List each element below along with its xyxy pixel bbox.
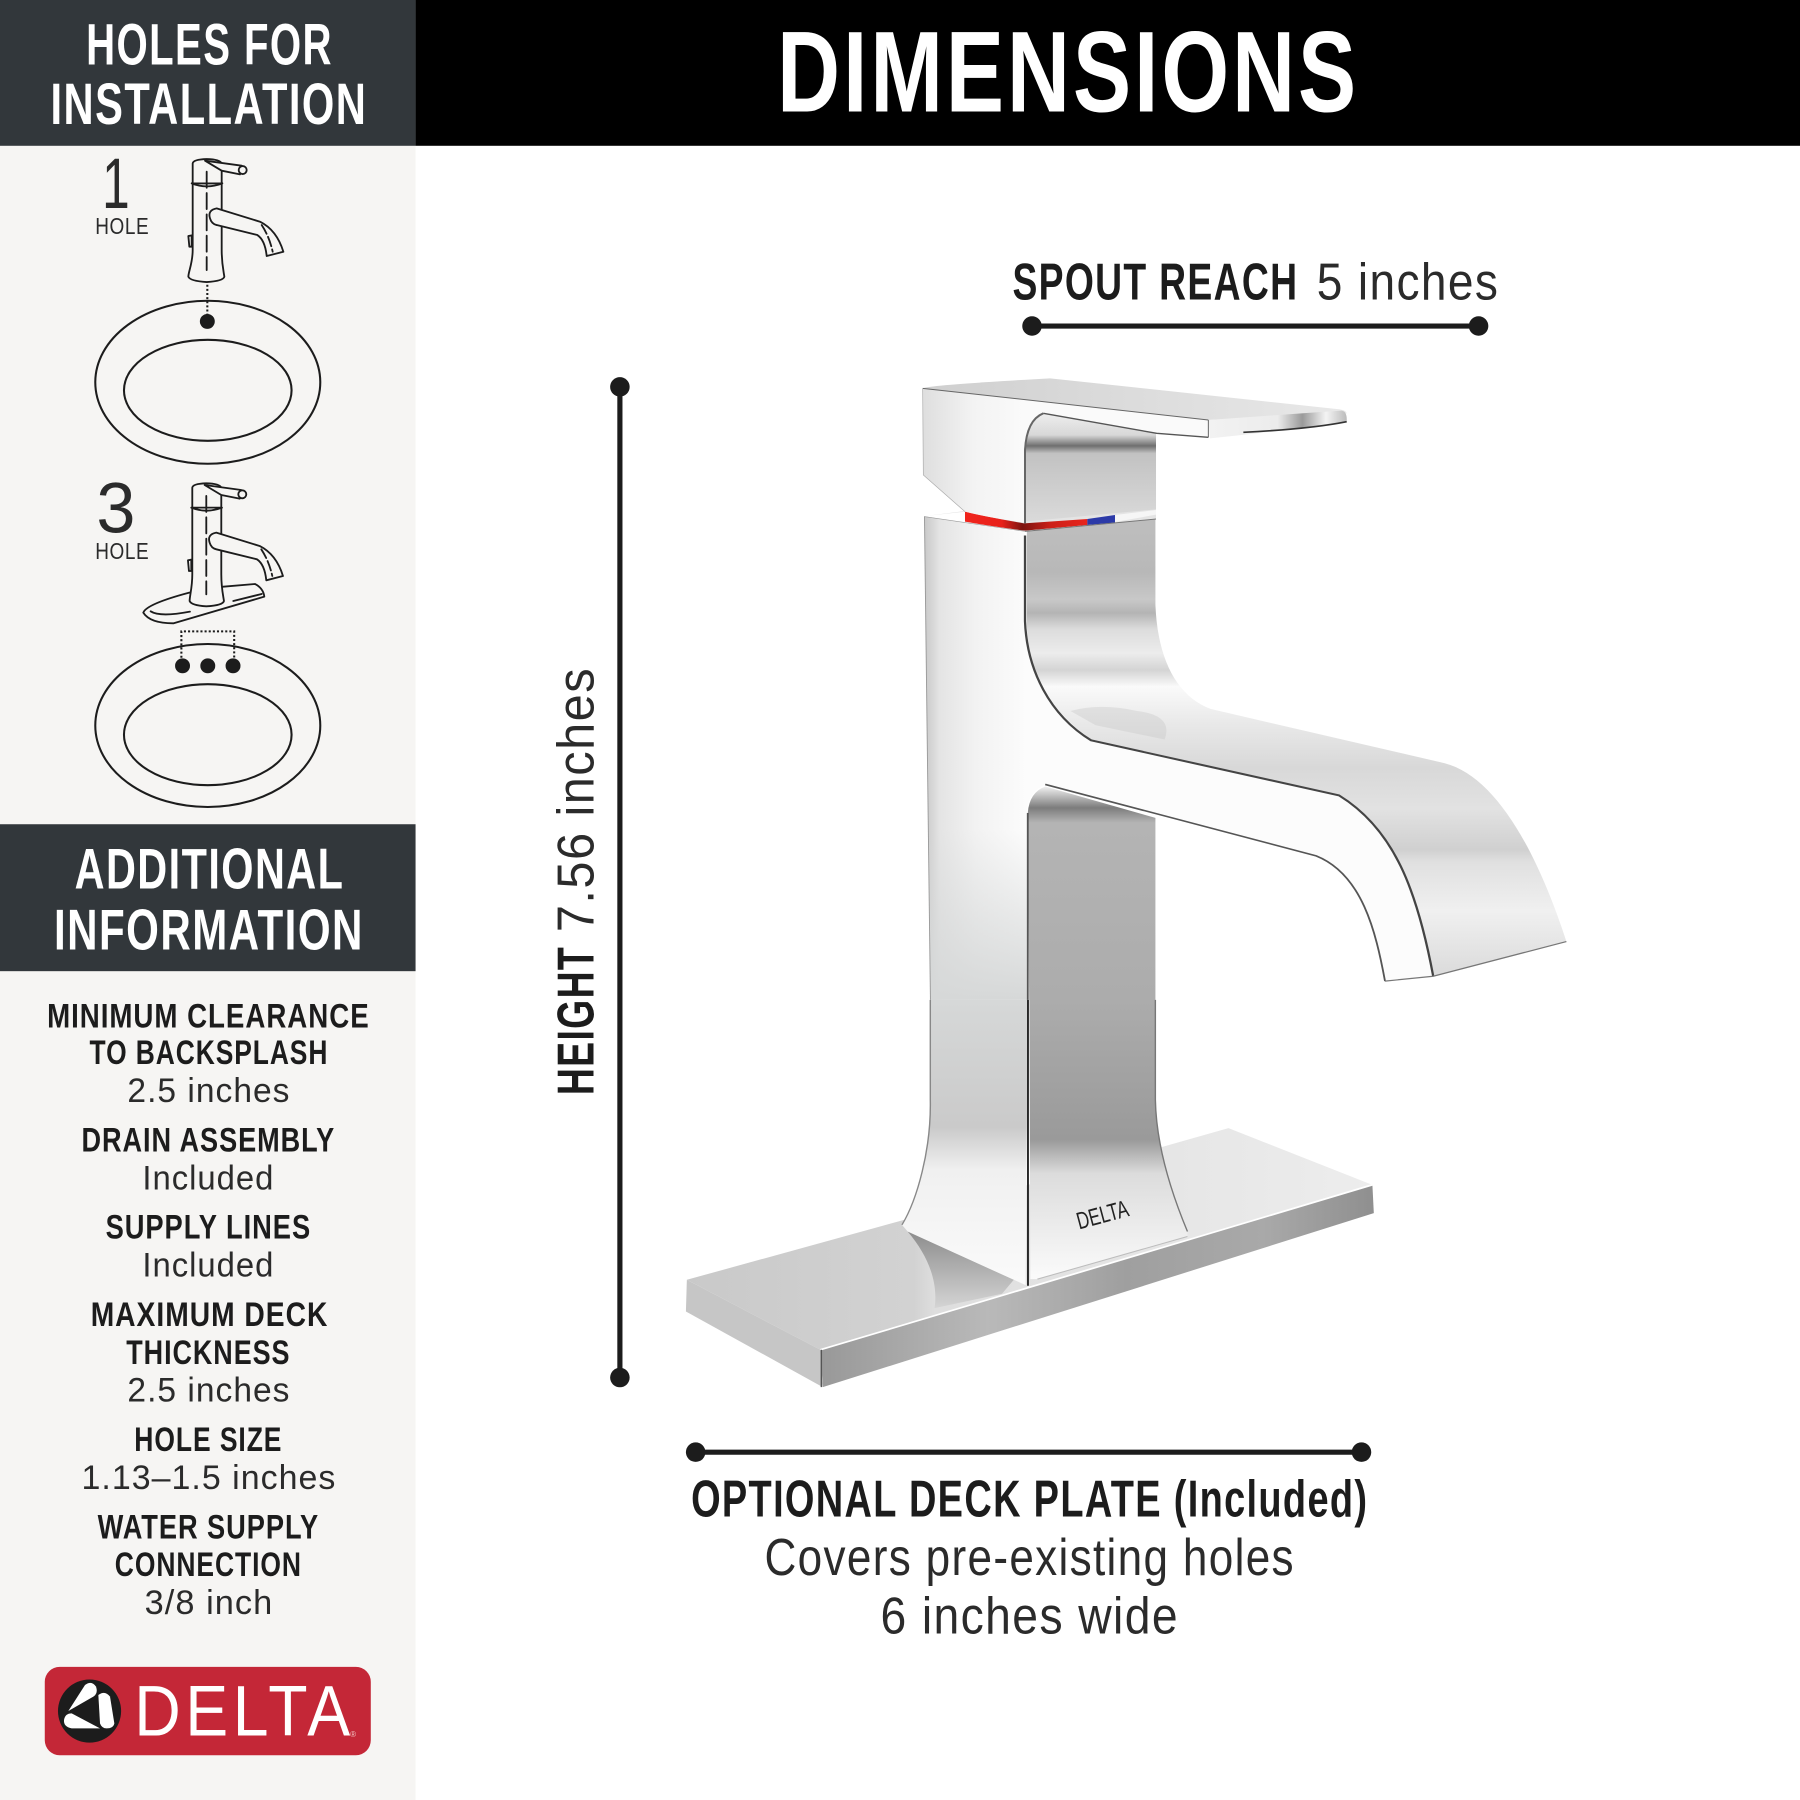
spec: water supply connection: CONNECTION — [115, 1546, 302, 1584]
dimension: optional deck plate — [686, 1442, 1371, 1645]
spec: supply lines: Included — [142, 1247, 274, 1285]
spec: maximum deck thickness: THICKNESS — [126, 1334, 290, 1372]
diagram: 1 hole installation — [95, 145, 320, 464]
specification list — [47, 997, 370, 1622]
dimension: height — [546, 377, 630, 1387]
banner: dimensions — [416, 0, 1800, 146]
diagram: 3 hole installation: 3 — [96, 470, 135, 549]
heading: holes for installation: HOLES FOR — [86, 12, 333, 77]
dimension: spout reach — [1013, 253, 1499, 336]
spec: minimum clearance — [47, 997, 370, 1110]
logo: delta: DELTA — [134, 1673, 355, 1752]
dimension: height: HEIGHT — [546, 946, 604, 1095]
diagram: 3 hole installation: HOLE — [95, 538, 149, 564]
diagram: 1 hole installation: 1 — [102, 145, 130, 224]
diagram: 1 hole installation: HOLE — [95, 213, 149, 239]
spec: minimum clearance: TO BACKSPLASH — [90, 1034, 328, 1072]
faucet brand mark: DELTA — [1074, 1195, 1132, 1235]
spec: supply lines: SUPPLY LINES — [106, 1209, 311, 1247]
spec: supply lines — [106, 1209, 311, 1285]
spec: maximum deck thickness — [91, 1296, 328, 1410]
spec: water supply connection: 3/8 inch — [145, 1584, 273, 1622]
heading: holes for installation — [0, 0, 416, 146]
faucet body and spout — [924, 516, 1566, 1000]
spec: maximum deck thickness: MAXIMUM DECK — [91, 1296, 328, 1334]
dimension: optional deck plate: OPTIONAL DECK PLATE (Included) — [691, 1469, 1368, 1527]
faucet illustration — [686, 378, 1566, 1387]
spec: hole size — [82, 1421, 336, 1497]
spec: hole size: 1.13–1.5 inches — [82, 1459, 336, 1497]
spec: water supply connection — [98, 1508, 319, 1622]
left sidebar panel — [0, 0, 416, 1800]
spec: water supply connection: WATER SUPPLY — [98, 1508, 319, 1546]
dimension: spout reach: 5 inches — [1317, 253, 1499, 311]
spec: hole size: HOLE SIZE — [134, 1421, 282, 1459]
dimension: optional deck plate: Covers pre-existing holes — [765, 1528, 1295, 1586]
spec: drain assembly: Included — [142, 1159, 274, 1197]
banner: dimensions: DIMENSIONS — [777, 8, 1359, 136]
spec: drain assembly — [82, 1121, 335, 1197]
diagram: 3 hole installation — [95, 470, 320, 807]
spec: minimum clearance: 2.5 inches — [127, 1072, 290, 1110]
logo: delta — [45, 1667, 371, 1755]
spec: maximum deck thickness: 2.5 inches — [127, 1372, 290, 1410]
dimension: optional deck plate: 6 inches wide — [880, 1587, 1179, 1645]
faucet handle and temperature ring — [923, 378, 1347, 531]
spec: minimum clearance: MINIMUM CLEARANCE — [47, 997, 370, 1035]
deck plate and faucet base — [686, 1000, 1374, 1387]
heading: holes for installation: INSTALLATION — [51, 72, 367, 137]
heading: additional information: ADDITIONAL — [75, 838, 344, 902]
spec: drain assembly: DRAIN ASSEMBLY — [82, 1121, 335, 1159]
heading: additional information — [0, 824, 416, 971]
logo: delta: ® — [350, 1730, 356, 1739]
dimension: spout reach: SPOUT REACH — [1013, 253, 1298, 311]
heading: additional information: INFORMATION — [54, 898, 364, 962]
dimension: height: 7.56 inches — [546, 667, 604, 932]
